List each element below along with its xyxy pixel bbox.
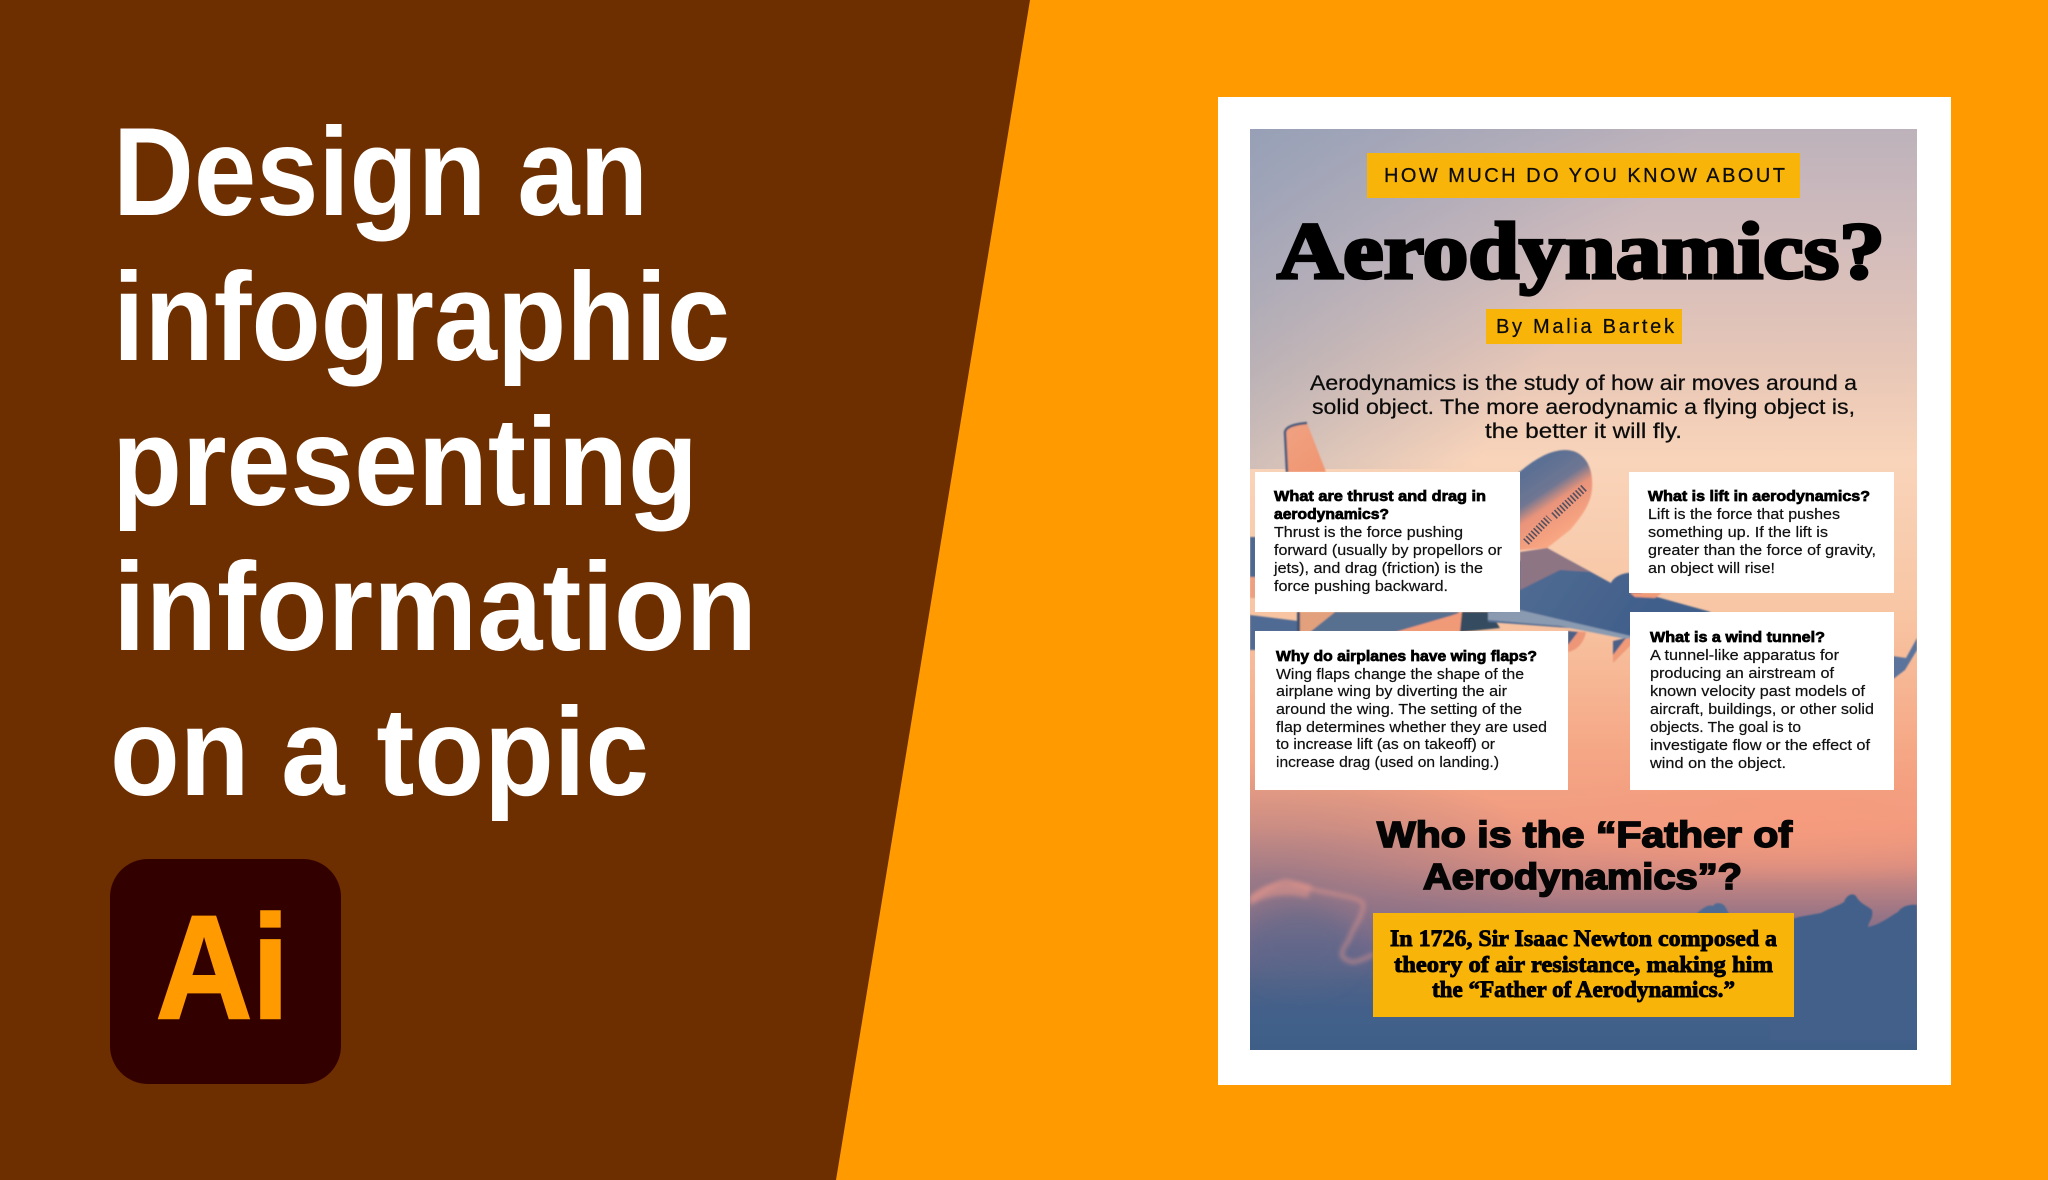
- far wing tip: [1892, 638, 1917, 680]
- intro paragraph: the better it will fly.: [1485, 419, 1682, 443]
- card: thrust and drag: jets), and drag (friction) is the: [1273, 561, 1483, 577]
- intro paragraph: solid object. The more aerodynamic a flying object is,: [1312, 395, 1855, 419]
- callout: isaac newton: [1373, 913, 1794, 1017]
- card: wing flaps: to increase lift (as on takeoff) or: [1276, 737, 1495, 753]
- sky background photo: [1245, 129, 1917, 1050]
- pink cloud wisp: [1250, 881, 1372, 962]
- card: lift: Lift is the force that pushes: [1648, 507, 1840, 523]
- card: wing flaps: airplane wing by diverting the air: [1276, 684, 1507, 700]
- intro paragraph: [1310, 371, 1857, 443]
- card: thrust and drag: aerodynamics?: [1274, 507, 1389, 523]
- cloud silhouettes: [1696, 894, 1917, 994]
- icon: Adobe Illustrator logo: Ai: [156, 886, 289, 1050]
- flap fairings: [1568, 631, 1586, 652]
- card: wing flaps: [1255, 631, 1568, 790]
- card: lift: What is lift in aerodynamics?: [1648, 489, 1870, 505]
- callout: isaac newton: theory of air resistance, making him: [1394, 952, 1773, 978]
- card: lift: an object will rise!: [1648, 561, 1775, 577]
- card: wind tunnel: What is a wind tunnel?: [1650, 630, 1825, 646]
- card: wind tunnel: aircraft, buildings, or other solid: [1650, 702, 1874, 718]
- card: wing flaps: flap determines whether they are used: [1276, 720, 1547, 736]
- windows: [1526, 487, 1585, 542]
- heading: design an infographic: presenting: [112, 393, 698, 532]
- heading: design an infographic: Design an: [113, 103, 648, 242]
- card: wind tunnel: investigate flow or the effect of: [1650, 738, 1871, 754]
- heading: design an infographic: information: [113, 538, 757, 677]
- poster: aerodynamics infographic: [1245, 129, 1917, 1050]
- fuselage nose: [1510, 450, 1592, 550]
- heading: father of aerodynamics: Who is the “Father of: [1377, 814, 1793, 855]
- heading: design an infographic: infographic: [113, 248, 730, 387]
- card: wind tunnel: known velocity past models of: [1650, 684, 1866, 700]
- card: lift: greater than the force of gravity,: [1648, 543, 1876, 559]
- card: thrust and drag: What are thrust and drag in: [1274, 489, 1486, 505]
- intro paragraph: Aerodynamics is the study of how air moves around a: [1310, 371, 1857, 395]
- callout: isaac newton: In 1726, Sir Isaac Newton composed a: [1390, 926, 1777, 952]
- heading: design an infographic: on a topic: [110, 683, 649, 822]
- orange sliver under lift card: [1630, 593, 1662, 598]
- tail fin: [1285, 423, 1326, 472]
- card: wind tunnel: A tunnel-like apparatus for: [1650, 648, 1839, 664]
- card: wind tunnel: producing an airstream of: [1650, 666, 1835, 682]
- byline: [1486, 309, 1682, 344]
- main wing: [1488, 548, 1711, 640]
- callout: isaac newton: the “Father of Aerodynamics.”: [1432, 977, 1735, 1003]
- airplane: [1250, 423, 1917, 680]
- card: wind tunnel: [1630, 612, 1894, 790]
- heading: father of aerodynamics: [1377, 814, 1793, 897]
- heading: father of aerodynamics: Aerodynamics”?: [1423, 856, 1742, 897]
- white poster frame: [1218, 97, 1951, 1085]
- card: thrust and drag: force pushing backward.: [1274, 579, 1448, 595]
- card: lift: [1629, 472, 1894, 593]
- card: thrust and drag: Thrust is the force pushing: [1274, 525, 1463, 541]
- left stabilizer and tail strips: [1250, 536, 1255, 578]
- card: wing flaps: around the wing. The setting of the: [1276, 702, 1522, 718]
- heading: design an infographic: [110, 103, 757, 822]
- card: wind tunnel: wind on the object.: [1649, 756, 1786, 772]
- top label: [1367, 153, 1800, 198]
- card: wind tunnel: objects. The goal is to: [1650, 720, 1801, 736]
- card: thrust and drag: [1255, 472, 1520, 612]
- title: Aerodynamics?: [1277, 208, 1885, 296]
- fuselage rear between cards: [1300, 612, 1335, 632]
- cloud shadow on left: [1250, 900, 1350, 960]
- top label: HOW MUCH DO YOU KNOW ABOUT: [1384, 165, 1785, 187]
- card: thrust and drag: forward (usually by propellors or: [1274, 543, 1502, 559]
- dark brown diagonal panel: [0, 0, 1030, 1180]
- icon: Adobe Illustrator logo: [110, 859, 341, 1084]
- byline: By Malia Bartek: [1496, 316, 1675, 338]
- card: wing flaps: Why do airplanes have wing flaps?: [1276, 649, 1537, 665]
- card: wing flaps: increase drag (used on landing.): [1276, 755, 1499, 771]
- card: wing flaps: Wing flaps change the shape of the: [1276, 667, 1524, 683]
- card: lift: something up. If the lift is: [1648, 525, 1828, 541]
